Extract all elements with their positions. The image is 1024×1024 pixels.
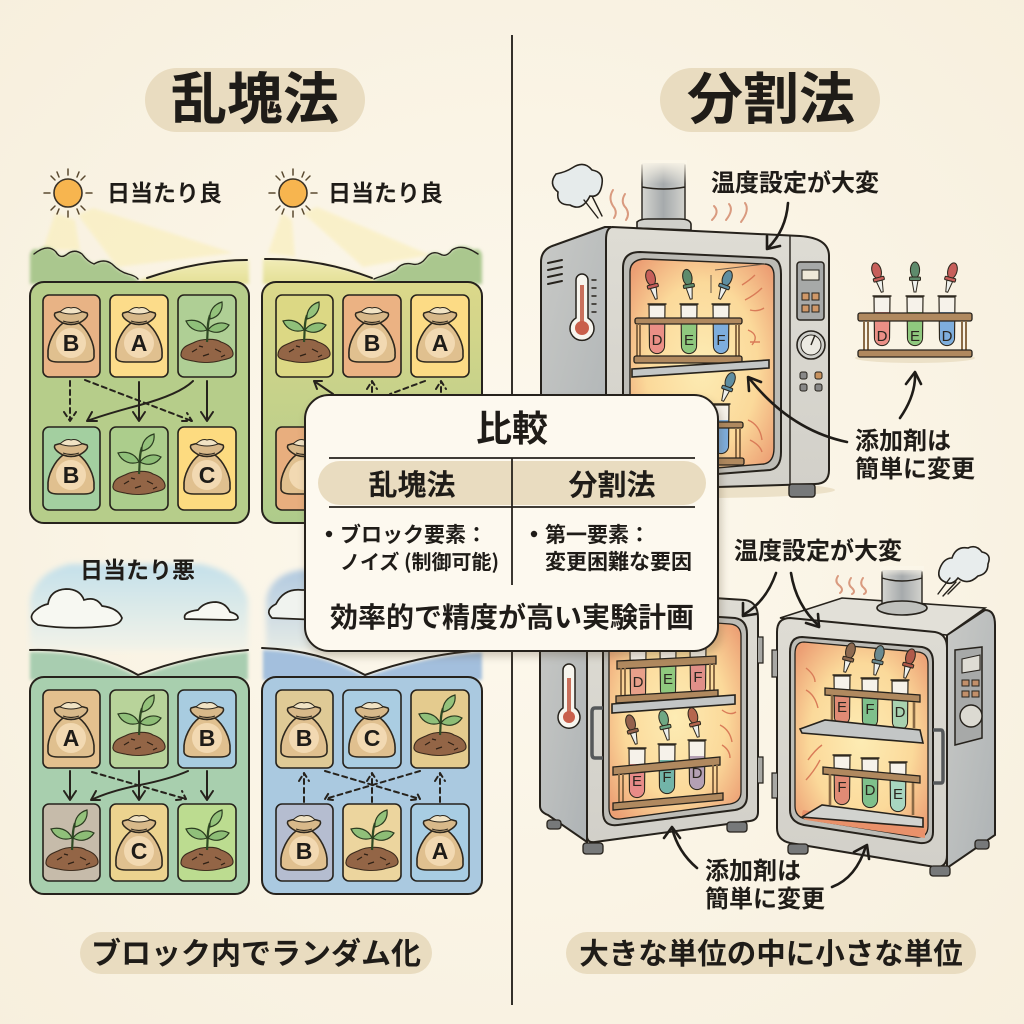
cell: bag A: [411, 804, 469, 881]
cloud: [31, 589, 122, 628]
label: shaded: 日当たり悪: [80, 551, 195, 585]
oven: lower right chamber: [772, 566, 995, 876]
upper rack with tubes D E F: F: [716, 332, 726, 349]
cell: sprout: [43, 804, 100, 881]
label: temperature hard (bottom): 温度設定が大変: [734, 531, 902, 566]
handle: [592, 708, 603, 758]
cell: bag C: [343, 690, 401, 768]
arrow: additive to oven shelf: [748, 377, 847, 442]
cell: bag B: B: [63, 330, 79, 356]
cell: sprout: [110, 427, 168, 510]
chimney: [877, 566, 927, 615]
label: additive easy (bottom): 添加剤は: [705, 851, 801, 886]
hinges: [772, 650, 777, 798]
comparison right column: [531, 519, 692, 576]
arrows: additive to ovens: [664, 827, 869, 887]
feet: [547, 820, 747, 854]
cell: sprout: [343, 804, 401, 881]
cell: bag A: [43, 690, 100, 768]
hinges: [758, 637, 763, 783]
cell: bag B: [43, 295, 100, 377]
cell: bag B: B: [296, 838, 312, 864]
cell: bag A: [110, 295, 168, 377]
cell: bag C: C: [364, 725, 380, 751]
icon: sun: [269, 169, 317, 217]
heat lines: [742, 275, 764, 452]
heat wisps bottom: [836, 576, 866, 594]
lower rack with tubes F D E: D: [865, 782, 876, 799]
upper rack with tubes D E F: [634, 268, 742, 363]
upper rack with tubes E F D: D: [895, 704, 906, 721]
shelf: [632, 360, 769, 377]
sky: [30, 564, 248, 650]
cell: bag B: [178, 690, 236, 768]
label: sunny: 日当たり良: [107, 174, 222, 208]
comparison header row: [318, 458, 706, 507]
cell: bag B: B: [364, 330, 380, 356]
comparison left column: ブロック要素：: [340, 519, 487, 549]
panel: field block 3: [30, 677, 249, 894]
comparison conclusion: 効率的で精度が高い実験計画: [330, 596, 694, 636]
heat wisps top: [610, 190, 747, 222]
comparison header row: 乱塊法: [368, 462, 456, 504]
comparison header row: 分割法: [568, 462, 656, 504]
cell: bag B: [343, 295, 401, 377]
lower rack with tubes F D E: [823, 755, 920, 815]
oven front: [777, 618, 947, 867]
oven front: [587, 590, 758, 842]
oven side: [540, 590, 587, 842]
cloud: [185, 602, 238, 620]
side rack with tubes D E D: D: [942, 328, 953, 345]
cell: bag B: B: [199, 725, 215, 751]
icon: sun: [44, 169, 92, 217]
label: sunny: 日当たり良: [328, 174, 443, 208]
cell: sprout: [178, 295, 236, 377]
side rack with tubes D E D: E: [910, 328, 920, 345]
icon: steam cloud top: [552, 164, 602, 218]
scene: sunny block 2: [262, 169, 482, 523]
arrows: randomisation: [64, 771, 213, 800]
sky: [266, 570, 470, 650]
cell: bag A: A: [432, 838, 448, 864]
foot: [789, 484, 815, 497]
upper rack with tubes D E F: D: [652, 332, 663, 349]
control panel: [797, 262, 825, 391]
cell: bag A: A: [63, 725, 79, 751]
cell: bag B: [276, 690, 333, 768]
caption: left: ブロック内でランダム化: [91, 929, 421, 973]
label: additive easy (top): [855, 421, 975, 484]
hills: [30, 650, 248, 680]
label: additive easy (top): 簡単に変更: [855, 449, 975, 484]
cell: bag B: [43, 427, 100, 510]
oven window: [790, 637, 933, 843]
upper rack with tubes E F D: [825, 642, 920, 730]
shadow: [565, 482, 835, 498]
oven side: [947, 610, 995, 868]
cell: sprout: [411, 690, 469, 768]
oven: lower left chamber: [540, 590, 763, 854]
field and hedge: [30, 247, 249, 284]
upper rack with tubes D E F: F: [693, 669, 703, 686]
cloud (partly hidden): [269, 590, 320, 620]
upper rack with tubes D E F: D: [633, 674, 644, 691]
arrows: randomisation: [299, 771, 445, 802]
cell: sprout: [110, 690, 168, 768]
label: temperature hard (top): 温度設定が大変: [711, 163, 879, 198]
field and hedge: [263, 246, 482, 284]
hills: [262, 648, 482, 680]
feet: [788, 840, 989, 876]
caption: right: 大きな単位の中に小さな単位: [579, 931, 963, 973]
upper rack with tubes D E F: [616, 645, 718, 703]
upper rack with tubes E F D: F: [865, 701, 875, 718]
cell: bag A: [411, 295, 469, 377]
comparison title: 比較: [476, 400, 548, 452]
cell: bag B: B: [296, 725, 312, 751]
cell: bag A: A: [432, 330, 448, 356]
panel: comparison: [305, 395, 722, 657]
comparison left column: ノイズ (制御可能): [340, 546, 499, 575]
arrows: randomisation: [314, 381, 446, 410]
cell: bag (partly hidden): [276, 427, 333, 510]
chimney: [637, 160, 691, 230]
arrow: additive to side rack: [900, 372, 921, 418]
sun rays onto field: [43, 208, 233, 267]
cell: bag C: C: [199, 462, 215, 488]
cell: bag C: [110, 804, 168, 881]
comparison right column: 第一要素：: [545, 519, 650, 549]
cell: sprout: [178, 804, 236, 881]
comparison left column: [326, 519, 499, 575]
heat lines: [720, 710, 736, 758]
lower rack with tubes E F D: F: [662, 769, 672, 786]
lower rack: [634, 371, 744, 465]
shelf: [612, 695, 735, 713]
side rack with tubes D E D: D: [877, 328, 888, 345]
cell: bag C: [178, 427, 236, 510]
title: 分割法: 分割法: [687, 55, 855, 136]
thermometer: [558, 664, 580, 728]
handle: [933, 730, 943, 783]
oven window: [623, 252, 781, 480]
oven side: [541, 227, 610, 490]
heat lines: [806, 668, 822, 780]
upper rack with tubes D E F: E: [663, 671, 673, 688]
panel: field block 1: [30, 282, 249, 523]
scene: shaded block 1: [30, 551, 249, 894]
upper rack with tubes D E F: E: [684, 332, 694, 349]
lower rack with tubes F D E: F: [837, 779, 847, 796]
cell: bag C: C: [131, 838, 147, 864]
scene: sunny block 1: [30, 169, 249, 523]
label: additive easy (top): 添加剤は: [855, 421, 951, 456]
title: 乱塊法: 乱塊法: [171, 55, 339, 136]
icon: steam cloud bottom: [938, 547, 989, 596]
cell: bag B: [276, 804, 333, 881]
label: additive easy (bottom): 簡単に変更: [705, 879, 825, 914]
side rack with tubes D E D: [855, 262, 975, 363]
sun rays onto field: [268, 207, 430, 267]
center divider line: [511, 35, 513, 1005]
arrows: randomisation: [64, 380, 213, 421]
cell: sprout: [276, 295, 333, 377]
oven top: [780, 598, 985, 635]
lower rack with tubes E F D: [613, 707, 723, 810]
thermometer: [570, 274, 596, 340]
lower rack with tubes F D E: E: [893, 786, 903, 803]
scene: shaded block 2: [262, 570, 482, 894]
oven window: [603, 610, 747, 825]
shelf: [802, 805, 923, 827]
oven front: [606, 227, 829, 490]
vents: [548, 260, 562, 284]
arrow: temperature to oven: [767, 203, 788, 249]
upper rack with tubes E F D: E: [837, 699, 847, 716]
cell: bag A: A: [131, 330, 147, 356]
comparison right column: 変更困難な要因: [545, 546, 692, 576]
arrows: temperature to ovens: [743, 573, 819, 627]
lower rack with tubes E F D: E: [632, 773, 642, 790]
control panel: [955, 647, 982, 745]
shelf: [800, 720, 923, 743]
lower rack with tubes E F D: D: [692, 765, 703, 782]
cell: bag B: B: [63, 462, 79, 488]
panel: field block 4: [262, 677, 482, 894]
panel: field block 2: [262, 282, 482, 523]
label: additive easy (bottom): [705, 851, 825, 914]
oven: top chamber: [541, 160, 835, 498]
